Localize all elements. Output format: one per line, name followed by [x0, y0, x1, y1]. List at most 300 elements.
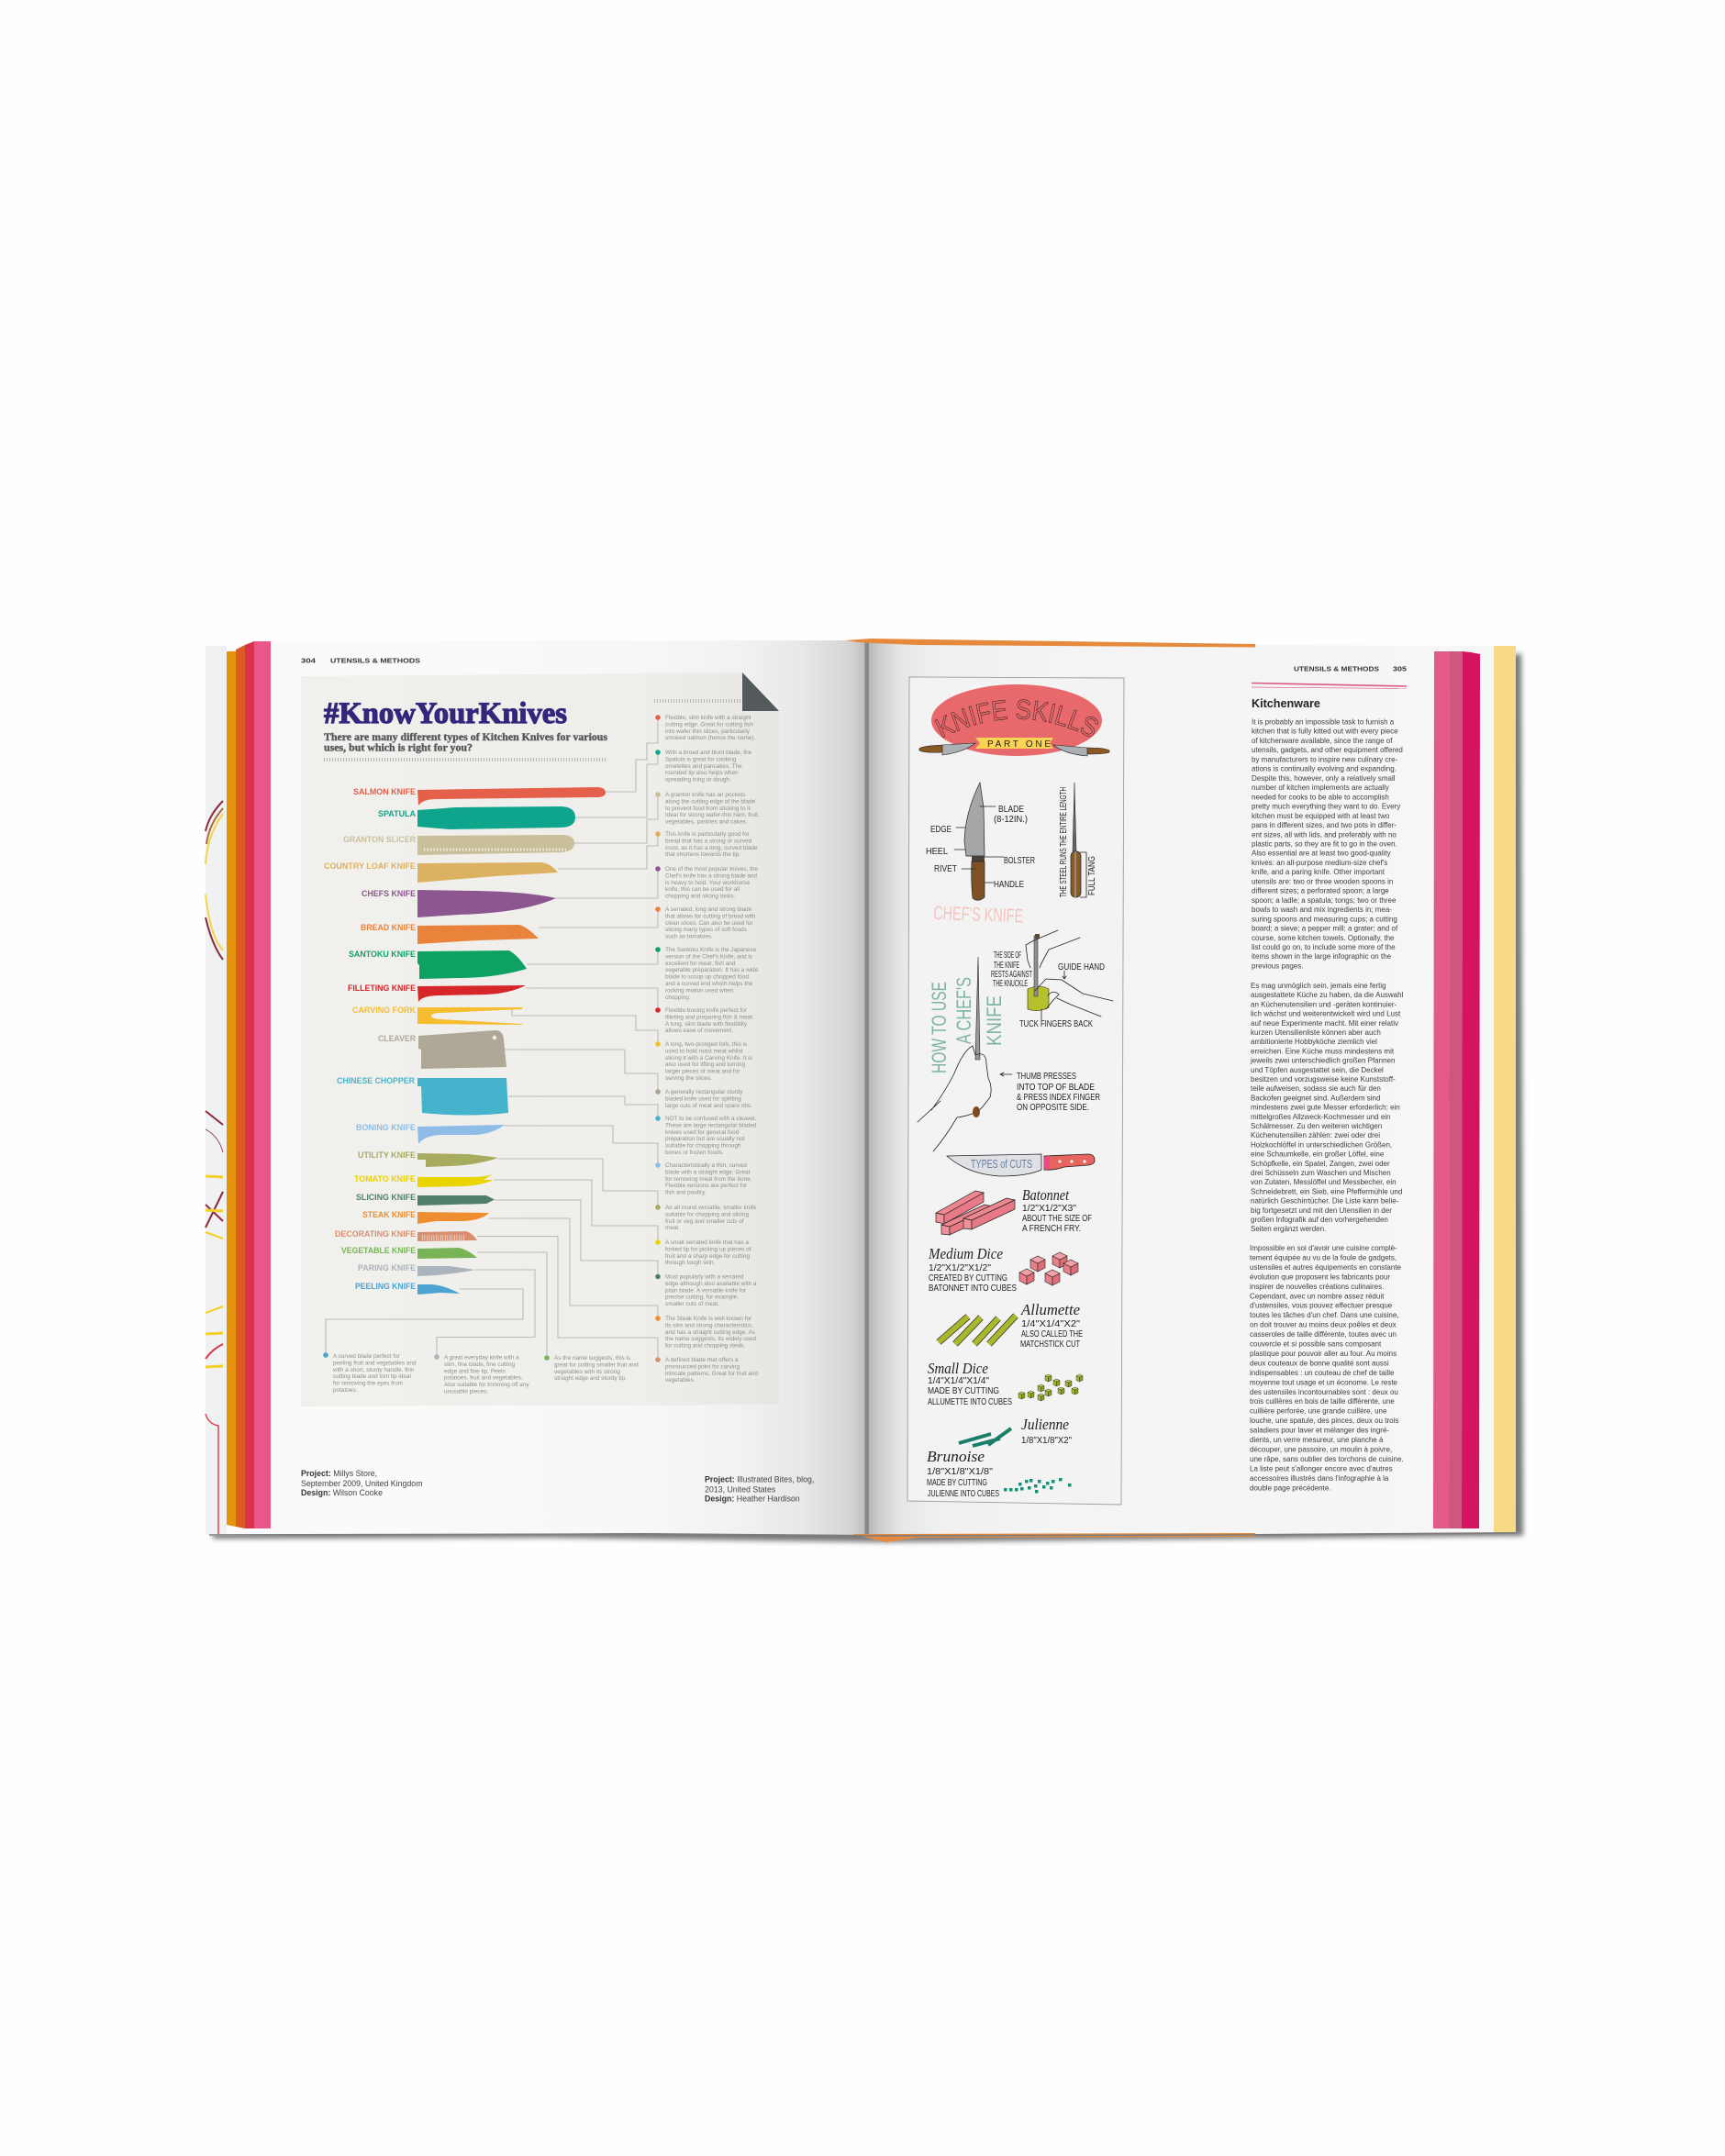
description: bread: slicing many types of soft foods — [665, 927, 747, 933]
description: santoku: excellent for meat, fish and — [665, 961, 736, 967]
knife: cleaver: CLEAVER — [378, 1034, 416, 1043]
chef's knife diagram: BLADE — [998, 805, 1024, 815]
english text block: list could go on, to include some more of the — [1252, 943, 1396, 951]
title badge: knife skills — [919, 684, 1110, 756]
description: santoku: rocking motion used when — [665, 987, 734, 994]
description: utility: fruit or veg and smaller cuts of — [665, 1218, 744, 1225]
cut: brunoise: Brunoise — [927, 1448, 985, 1465]
description: granton: along the cutting edge of the blade — [665, 798, 756, 805]
credit: illustrated bites: Illustrated Bites, blog, — [735, 1475, 814, 1484]
cut: batonnet: Batonnet — [1022, 1186, 1070, 1204]
french text block: des ustensiles incontournables sont : deux ou — [1250, 1388, 1398, 1396]
description: paring: unusable pieces. — [444, 1389, 488, 1395]
cut: allumette: ALSO CALLED THE — [1021, 1329, 1083, 1339]
german text block: Schneidebrett, ein Sieb, eine Pfeffermühle und — [1251, 1187, 1402, 1195]
description: chinese chopper: suitable for chopping through — [665, 1143, 741, 1150]
description: carving fork: also used for lifting and turning — [665, 1061, 745, 1068]
german text block: mittelgroßes Allzweck-Kochmesser und ein — [1251, 1113, 1391, 1121]
description: steak: The Steak Knife is well known for — [665, 1316, 752, 1322]
title badge: knife skills: KNIFE SKILLS — [934, 699, 1098, 738]
description: slicing: precise cutting, for example, — [665, 1295, 739, 1301]
french text block: moyenne tout usage et un économe. Le reste — [1250, 1378, 1398, 1386]
description: santoku — [655, 947, 759, 1001]
left cover strip with rings — [206, 646, 227, 1535]
knife: spatula: SPATULA — [378, 809, 416, 818]
cut: julienne — [959, 1416, 1072, 1446]
english text block: utensils are: two or three wooden spoons in — [1252, 877, 1393, 885]
french text block: ustensiles et autres équipements en constante — [1250, 1263, 1402, 1272]
knife: chinese chopper — [337, 1076, 508, 1116]
knife: cleaver — [378, 1030, 506, 1069]
description: paring — [434, 1354, 529, 1395]
description: santoku: and a curved end which helps the — [665, 981, 753, 987]
left page header: 304 — [301, 657, 317, 664]
description: peeling: potatoes. — [333, 1387, 358, 1394]
description: spatula: With a broad and blunt blade, the — [665, 750, 752, 756]
description: filleting: allows ease of movement. — [665, 1028, 733, 1034]
knife: slicing: SLICING KNIFE — [356, 1193, 416, 1202]
types of cuts knife: TYPES of CUTS — [971, 1157, 1032, 1171]
description: tomato: forked tip for picking up pieces of — [665, 1246, 751, 1252]
credit: millys store: Design: — [301, 1488, 330, 1497]
thumb instructions with arrow: INTO TOP OF BLADE — [1017, 1083, 1095, 1093]
description: vegetable: great for cutting smaller fruit and — [554, 1361, 639, 1368]
description: cleaver — [655, 1089, 752, 1109]
german text block: lich wächst und weiterentwickelt wird und Lust — [1251, 1010, 1401, 1018]
illustration: guide hand and food: THE KNIFE — [994, 961, 1019, 971]
chef's knife diagram — [926, 783, 1035, 927]
description: salmon: cutting edge. Great for cutting fish — [665, 721, 753, 728]
credit: illustrated bites: Project: — [705, 1475, 735, 1484]
description: boning: Characteristically a thin, curved — [665, 1162, 747, 1169]
description: paring: slim, fine blade, fine cutting — [444, 1361, 516, 1368]
description: boning: Flexible versions are perfect for — [665, 1183, 748, 1189]
description: carving fork: larger pieces of meat and for — [665, 1069, 740, 1075]
english text block: knives: an all-purpose medium-size chef's — [1252, 859, 1387, 867]
orange ribbon bottom — [852, 1533, 1255, 1542]
english text block: pans in different sizes, and two pots in differ- — [1252, 821, 1397, 829]
description: santoku: blade to scoop up chopped food — [665, 974, 749, 981]
thumb instructions with arrow: ON OPPOSITE SIDE. — [1017, 1103, 1089, 1113]
description: tomato: fruit and a sharp edge for cutting — [665, 1253, 750, 1260]
english text block: ations is continually evolving and expanding. — [1252, 765, 1397, 773]
french text block: on doit trouver au moins deux poêles et deux — [1250, 1321, 1397, 1329]
english text block: utensils, gadgets, and other equipment offered — [1252, 746, 1403, 754]
knife: utility: UTILITY KNIFE — [358, 1150, 416, 1160]
description: carving fork: used to hold roast meat whilst — [665, 1048, 743, 1054]
right page header — [1252, 664, 1408, 688]
german text block: erreichen. Eine Küche muss mindestens mit — [1251, 1047, 1395, 1055]
illustration: guide hand and food: THE SIDE OF — [994, 950, 1021, 961]
french text block: toutes les tâches d'un chef. Dans une cuisine, — [1250, 1311, 1399, 1319]
knife: granton slicer: GRANTON SLICER — [343, 835, 416, 844]
description: vegetable: As the name suggests, this is — [554, 1355, 630, 1361]
french text block: Impossible en soi d'avoir une cuisine complè- — [1250, 1244, 1397, 1252]
left page colour edge stripes — [227, 641, 271, 1528]
description: steak: for cutting and chopping steak. — [665, 1343, 745, 1350]
book shadow — [213, 653, 1523, 1542]
chef's knife diagram: BOLSTER — [1004, 856, 1035, 866]
description: chinese chopper: bones or frozen foods. — [665, 1150, 724, 1156]
heading: Kitchenware: Kitchenware — [1252, 697, 1320, 710]
knife: steak — [362, 1210, 489, 1224]
german text block: Küchenutensilien zählen: zwei oder drei — [1251, 1131, 1380, 1139]
left page — [206, 640, 868, 1536]
description: boning: fish and poultry. — [665, 1190, 707, 1196]
description: chefs: Chef's knife has a strong blade and — [665, 872, 757, 879]
english text block: kitchen that is fully kitted out with every piece — [1252, 728, 1398, 736]
description: country loaf: This knife is particularly good for — [665, 831, 751, 838]
english text block: Also essential are at least two good-quality — [1252, 850, 1391, 858]
knife: vegetable — [341, 1246, 477, 1259]
description: granton: to prevent food from sticking to it. — [665, 806, 751, 812]
right page header: UTENSILS & METHODS — [1294, 664, 1379, 673]
description: paring: edge and fine tip. Peels — [444, 1368, 506, 1374]
knife: boning — [356, 1123, 505, 1144]
cut: small dice — [928, 1360, 1083, 1407]
infographic subtitle: uses, but which is right for you? — [324, 743, 473, 754]
description: granton: Ideal for slicing wafer-thin ham, fruit, — [665, 812, 760, 818]
description: country loaf: that shortens towards the tip. — [665, 851, 740, 858]
cut: brunoise: 1/8"X1/8"X1/8" — [927, 1467, 993, 1477]
description: tomato: A small serrated knife that has a — [665, 1239, 749, 1246]
description: vegetable — [544, 1355, 639, 1382]
description: chefs: is heavy to hold. Your workhorse — [665, 880, 750, 886]
infographic panel: knife skills — [907, 677, 1125, 1505]
infographic subtitle: There are many different types of Kitchen Knives for various — [324, 732, 608, 743]
description: bread — [655, 906, 756, 940]
cut: medium dice: BATONNET INTO CUBES — [929, 1284, 1017, 1294]
description: cleaver: bladed knife used for splitting — [665, 1095, 741, 1102]
knife: slicing — [356, 1193, 495, 1206]
description: decorating: intricate patterns. Great for fruit and — [665, 1371, 758, 1377]
illustration: hand holding knife — [918, 957, 991, 1151]
knife: paring: PARING KNIFE — [358, 1263, 416, 1272]
description: spatula: rounded tip also helps when — [665, 770, 739, 776]
english text block: ent sizes, all with lids, and preferably with no — [1252, 830, 1397, 839]
french text block: découper, une passoire, un moulin à poivre, — [1250, 1445, 1392, 1453]
english text block: of kitchenware available, since the range of — [1252, 737, 1393, 745]
description: slicing: edge although also available with a — [665, 1281, 757, 1287]
description: steak: the name suggests, its widely used — [665, 1336, 757, 1342]
knife: utility — [358, 1150, 498, 1167]
description: filleting: A long, slim blade with flexibility — [665, 1021, 748, 1028]
description: utility: suitable for chopping and slicing — [665, 1211, 749, 1217]
description: peeling — [323, 1352, 417, 1394]
description: chefs: chopping and slicing tasks. — [665, 894, 736, 900]
chef's knife diagram: CHEF'S KNIFE — [933, 903, 1024, 927]
credit: millys store: Wilson Cooke — [330, 1488, 383, 1497]
description: boning: blade with a straight edge. Great — [665, 1169, 751, 1175]
description: peeling: with a short, sturdy handle, thin — [332, 1367, 415, 1373]
english text block: It is probably an impossible task to furnish a — [1252, 717, 1395, 727]
cut: medium dice: CREATED BY CUTTING — [929, 1273, 1007, 1284]
hatched divider right — [654, 699, 742, 703]
knife: peeling: PEELING KNIFE — [355, 1282, 416, 1291]
cut: brunoise: JULIENNE INTO CUBES — [928, 1489, 999, 1499]
left page header — [301, 657, 420, 664]
knife: spatula — [378, 806, 575, 829]
credit: illustrated bites: Design: — [705, 1494, 734, 1503]
description: boning: for removing meat from the bone. — [665, 1176, 752, 1183]
description: filleting — [655, 1007, 754, 1034]
description: granton: vegetables, pastries and cakes. — [665, 819, 748, 826]
german text block: Backofen geeignet sind. Außerdem sind — [1251, 1094, 1380, 1102]
knife: filleting — [348, 984, 526, 1002]
description: bread: clean slices. Can also be used for — [665, 920, 753, 927]
french text block: une râpe, sans oublier des torchons de cuisine. — [1250, 1455, 1404, 1463]
cut: brunoise — [927, 1448, 1072, 1499]
description: vegetable: straight edge and sturdy tip. — [554, 1375, 627, 1382]
heading: how to use a chef's knife — [928, 977, 1006, 1073]
cut: allumette: 1/4"X1/4"X2" — [1021, 1319, 1080, 1329]
description: slicing: plain blade. A versatile knife for — [665, 1287, 747, 1294]
description: steak — [655, 1316, 757, 1350]
description: slicing: smaller cuts of meat. — [665, 1301, 719, 1307]
knife: country loaf: COUNTRY LOAF KNIFE — [324, 861, 416, 871]
description: cleaver: large cuts of meat and spare ribs. — [665, 1103, 752, 1109]
german text block: Seiten ergänzt werden. — [1251, 1225, 1326, 1233]
cut: batonnet: A FRENCH FRY. — [1022, 1224, 1081, 1234]
thumb instructions with arrow — [1000, 1072, 1100, 1113]
description: boning — [655, 1162, 752, 1196]
french text block: cuillière perforée, une grande cuillère, une — [1250, 1407, 1387, 1416]
credit: millys store: September 2009, United Kingdom — [301, 1479, 423, 1488]
german text block: natürlich Geschirrtücher. Die Liste kann belie- — [1251, 1197, 1399, 1206]
cut: batonnet: ABOUT THE SIZE OF — [1022, 1214, 1092, 1224]
knife: decorating — [335, 1229, 477, 1241]
chef's knife diagram: HEEL — [926, 847, 948, 857]
german text block: kurzen Utensilienliste können aber auch — [1251, 1028, 1381, 1037]
knife: tomato — [354, 1174, 494, 1187]
english text block: previous pages. — [1252, 961, 1303, 970]
german text block: besitzen und vorzugsweise keine Kunststoff- — [1251, 1075, 1396, 1084]
illustration: guide hand and food: THE KNUCKLE — [993, 979, 1028, 989]
description: chefs — [655, 866, 758, 900]
description: chinese chopper: These are large rectangular bladed — [665, 1122, 757, 1128]
heading: how to use a chef's knife: A CHEF'S — [952, 977, 975, 1044]
english text block: Despite this, however, only a relatively small — [1252, 774, 1396, 783]
knife: peeling — [355, 1282, 460, 1295]
knife: salmon — [353, 787, 606, 806]
description: tomato: through tough skin. — [665, 1260, 716, 1266]
knife: steak: STEAK KNIFE — [362, 1210, 416, 1219]
description: carving fork: slicing it with a Carving Knife. It is — [665, 1055, 752, 1061]
description: bread: A serrated, long and strong blade — [665, 906, 752, 913]
description: peeling: for removing the eyes from — [333, 1381, 403, 1387]
english text block: items shown in the large infographic on the — [1252, 952, 1392, 961]
credit: illustrated bites: Heather Hardison — [734, 1494, 800, 1503]
description: spatula — [655, 750, 752, 783]
english text block: knife, and a paring knife. Other important — [1252, 868, 1386, 876]
description: utility: meat. — [665, 1225, 680, 1231]
chef's knife diagram: (8-12IN.) — [994, 815, 1028, 825]
cut: small dice: MADE BY CUTTING — [928, 1386, 999, 1396]
german text block: an Küchenutensilien und -geräten kontinuier- — [1251, 1000, 1397, 1008]
french text block: casseroles de taille différente, toutes avec un — [1250, 1330, 1397, 1339]
description: spatula: omelettes and pancakes. The — [665, 763, 742, 770]
knife: paring — [358, 1263, 475, 1276]
description: cleaver: A generally rectangular sturdy — [665, 1089, 743, 1095]
description: santoku: The Santoku Knife is the Japanese — [665, 947, 757, 953]
knife: tomato: TOMATO KNIFE — [354, 1174, 416, 1184]
description: santoku: version of the Chef's Knife, and is — [665, 953, 752, 960]
folded corner — [742, 672, 779, 711]
french text block: plastique pour pouvoir aller au four. Au moins — [1250, 1350, 1397, 1358]
german text block: teile aufweisen, sodass sie auch für den — [1251, 1084, 1381, 1093]
knife: chefs: CHEFS KNIFE — [362, 889, 416, 898]
description: salmon: smoked salmon (hence the name). — [665, 735, 756, 741]
english text block: suring spoons and measuring cups; a cutting — [1252, 915, 1397, 923]
german text block: eine Schaumkelle, ein großer Löffel, eine — [1251, 1150, 1385, 1159]
description: chefs: One of the most popular knives, the — [665, 866, 758, 872]
french text block: évolution que proposent les fabricants pour — [1250, 1272, 1390, 1281]
description: decorating — [655, 1357, 758, 1384]
knife: chefs — [362, 889, 556, 917]
connector lines — [326, 717, 658, 1360]
german text block: ausgestattete Küche zu haben, da die Auswahl — [1251, 991, 1404, 999]
description: chinese chopper: knives used for general food — [665, 1129, 740, 1136]
cut: medium dice: 1/2"X1/2"X1/2" — [929, 1263, 991, 1273]
description: chefs: knife, this can be used for all — [665, 886, 740, 893]
illustration: guide hand and food: GUIDE HAND — [1058, 962, 1105, 972]
description: decorating: A defined blade that offers a — [665, 1357, 739, 1363]
cut: julienne: 1/8"X1/8"X2" — [1021, 1436, 1072, 1446]
french text block: tement équipée au vu de la foule de gadgets, — [1250, 1253, 1397, 1261]
description: steak: and has a straight cutting edge. As — [665, 1329, 755, 1336]
description: utility — [655, 1205, 757, 1231]
french text block: La liste peut s'allonger encore avec d'autres — [1250, 1464, 1393, 1473]
credit: millys store: Millys Store, — [331, 1469, 377, 1478]
english text block: by manufacturers to inspire new culinary cre- — [1252, 755, 1398, 763]
french text block: accessoires illustrés dans l'infographie à la — [1250, 1474, 1389, 1483]
bottom page edge line — [209, 1533, 1516, 1536]
german text block: ambitionierte Hobbyköche ziemlich viel — [1251, 1038, 1377, 1046]
description: chinese chopper: preparation but are usually not — [665, 1136, 745, 1142]
german text block: und Töpfen ausgestattet sein, die Deckel — [1251, 1066, 1384, 1074]
description: santoku: vegetable preparation. It has a wide — [665, 967, 759, 973]
knife: bread — [361, 923, 539, 944]
description: chinese chopper: NOT to be confused with a cleaver. — [665, 1116, 757, 1122]
description: vegetable: vegetables with its strong — [554, 1369, 620, 1375]
german text block: Holzkochlöffel in unterschiedlichen Größen, — [1251, 1140, 1392, 1149]
illustration: guide hand and food: TUCK FINGERS BACK — [1019, 1019, 1093, 1029]
french text block: d'ustensiles, vous pouvez effectuer presque — [1250, 1302, 1393, 1310]
german text block: drei Schüsseln zum Waschen und Mischen — [1251, 1169, 1391, 1177]
knife: bread: BREAD KNIFE — [361, 923, 416, 932]
illustration: guide hand and food: RESTS AGAINST — [991, 970, 1032, 980]
description: utility: An all round versatile, smaller knife — [665, 1205, 757, 1211]
carving fork — [352, 1006, 522, 1025]
description: carving fork: serving the slices. — [665, 1075, 712, 1082]
french text block: deux couteaux de bonne qualité sont aussi — [1250, 1359, 1389, 1367]
german text block: Schöpfkelle, ein Spatel, Zangen, zwei oder — [1251, 1160, 1390, 1168]
english text block: number of kitchen implements are actually — [1252, 783, 1389, 792]
infographic title: #KnowYourKnives — [324, 697, 567, 730]
german text block: big fortgesetzt und mit den Utensilien in der — [1251, 1206, 1392, 1215]
cut: allumette: Allumette — [1020, 1301, 1080, 1318]
english text block: spoon; a ladle; a spatula; tongs; two or three — [1252, 896, 1397, 905]
illustration: guide hand and food — [991, 930, 1113, 1029]
english text block: needed for cooks to be able to accomplish — [1252, 793, 1389, 801]
german text block: auf neue Experimente macht. Mit einer relativ — [1251, 1019, 1398, 1028]
french text block: double page précédente. — [1250, 1484, 1331, 1492]
knife: filleting: FILLETING KNIFE — [348, 984, 416, 993]
english text block: pretty much everything they want to do. Every — [1252, 803, 1400, 811]
cut: medium dice: Medium Dice — [928, 1245, 1003, 1262]
cut: batonnet — [936, 1186, 1092, 1235]
heading: how to use a chef's knife: KNIFE — [983, 995, 1006, 1046]
credit: illustrated bites: 2013, United States — [705, 1484, 776, 1494]
description: country loaf — [655, 831, 758, 858]
description: granton: A granton knife has air pockets — [665, 792, 745, 798]
german text block: großen Infografik auf den vorhergehenden — [1251, 1216, 1388, 1224]
french text block: Cependant, avec un nombre assez réduit — [1250, 1292, 1385, 1300]
chef's knife diagram: HANDLE — [994, 880, 1024, 890]
left page header: UTENSILS & METHODS — [330, 657, 420, 664]
french text block: dients, un verre mesureur, une planche à — [1250, 1436, 1384, 1444]
right page header: 305 — [1393, 664, 1408, 673]
description: paring: A great everyday knife with a — [444, 1354, 519, 1361]
description: slicing: Most popularly with a serrated — [665, 1273, 744, 1281]
full tang diagram — [1059, 783, 1097, 897]
knife: boning: BONING KNIFE — [356, 1123, 416, 1132]
description: tomato — [655, 1239, 751, 1266]
description: carving fork — [655, 1041, 752, 1082]
english text block: different sizes; a perforated spoon; a large — [1252, 887, 1389, 895]
knife: country loaf — [324, 861, 558, 883]
description: slicing — [655, 1273, 757, 1307]
chef's knife diagram: EDGE — [930, 825, 952, 835]
german text block: jeweils zwei unterschiedlich großen Pfannen — [1250, 1057, 1395, 1065]
description: filleting: filleting and preparing fish & meat. — [665, 1014, 754, 1020]
hatched divider left — [324, 758, 607, 761]
english text block: course, some kitchen towels. Optionally, the — [1252, 934, 1395, 942]
description: salmon — [655, 715, 756, 741]
infographic panel: know your knives — [301, 672, 779, 1406]
thumb instructions with arrow: THUMB PRESSES — [1017, 1072, 1076, 1082]
description: carving fork: A long, two-pronged fork, this is — [665, 1041, 747, 1048]
description: decorating: vegetables. — [665, 1377, 696, 1384]
full tang diagram: THE STEEL RUNS THE ENTIRE LENGTH — [1059, 787, 1069, 897]
knife: vegetable: VEGETABLE KNIFE — [341, 1246, 416, 1255]
german text block: mindestens zwei gute Messer erforderlich: ein — [1251, 1104, 1400, 1112]
heading: how to use a chef's knife: HOW TO USE — [928, 982, 951, 1073]
full tang diagram: FULL TANG — [1087, 856, 1097, 895]
description: santoku: chopping. — [665, 995, 691, 1001]
french text block: inspirer de nouvelles créations culinaires. — [1250, 1283, 1384, 1291]
chef's knife diagram: RIVET — [934, 864, 957, 874]
knife: chinese chopper: CHINESE CHOPPER — [337, 1076, 415, 1085]
description: peeling: peeling fruit and vegetables and — [333, 1360, 417, 1366]
description: salmon: into wafer thin slices, particularly — [665, 728, 751, 735]
english text block: kitchen must be equipped with at least two — [1252, 812, 1390, 820]
description: peeling: cutting blade and trim tip ideal — [333, 1373, 411, 1380]
cut: batonnet: 1/2"X1/2"X3" — [1022, 1204, 1076, 1214]
credit: millys store: Project: — [301, 1469, 331, 1478]
description: paring: Also suitable for trimming off any — [444, 1382, 529, 1388]
german text block: Schälmesser. Zu den weiteren wichtigen — [1251, 1122, 1382, 1130]
english text block: bowls to wash and mix ingredients in; mea- — [1252, 906, 1392, 914]
english text block: plastic parts, so they are fit to go in the oven. — [1252, 839, 1397, 848]
cut: medium dice — [928, 1245, 1078, 1294]
german text block: Es mag unmöglich sein, jemals eine fertig — [1251, 982, 1386, 990]
right page — [868, 642, 1516, 1535]
french text block: indispensables : un couteau de chef de taille — [1250, 1369, 1395, 1377]
title badge: knife skills: PART ONE — [987, 739, 1051, 750]
german text block: von Zutaten, Messlöffel und Messbecher, ein — [1251, 1178, 1397, 1186]
french text block: saladiers pour laver et mélanger des ingré- — [1250, 1427, 1389, 1435]
